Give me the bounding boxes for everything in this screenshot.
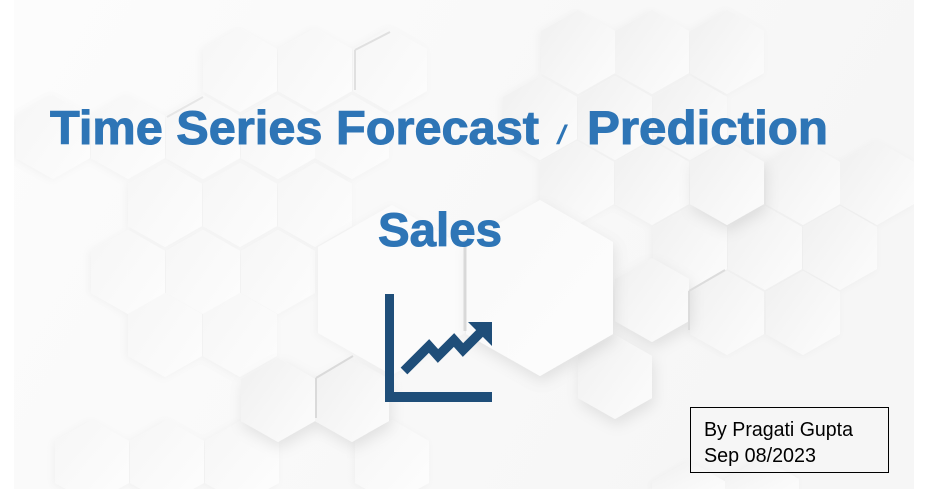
subtitle: Sales: Sales	[378, 203, 502, 256]
author box: By Pragati Gupta	[704, 419, 854, 441]
author box	[690, 408, 888, 472]
title	[50, 101, 828, 154]
title: /	[556, 120, 569, 150]
author box: Sep 08/2023	[704, 445, 816, 467]
title: Time Series Forecast	[50, 101, 539, 154]
icon: rising line chart	[385, 294, 492, 402]
title: Prediction	[587, 101, 828, 154]
